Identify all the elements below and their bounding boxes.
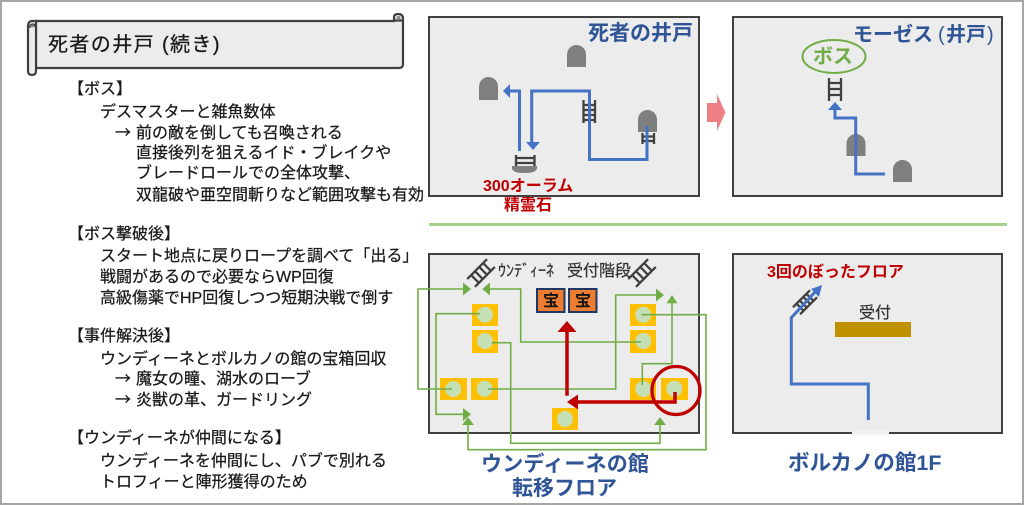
entrance gap xyxy=(852,431,889,435)
highlight circle and red route xyxy=(558,321,700,414)
panel: undine mansion xyxy=(418,254,706,450)
text block: after incident: 【事件解決後】 xyxy=(68,327,180,345)
title scroll banner: 死者の井戸 (続き) xyxy=(48,33,221,56)
icon: ladders xyxy=(467,259,656,287)
treasure chests: 宝 xyxy=(575,292,591,310)
divider xyxy=(429,223,1007,226)
arrow: route xyxy=(791,285,868,420)
text block: boss: ブレードロールでの全体攻撃、 xyxy=(136,163,360,182)
icon: well with ladder xyxy=(512,155,537,173)
text block: after incident: 魔女の瞳、湖水のローブ xyxy=(136,369,311,388)
label: reception: 受付 xyxy=(859,304,891,322)
panel: moses well xyxy=(733,17,1002,196)
heading: moses well: モーゼス xyxy=(853,22,933,46)
arrow: pink xyxy=(707,94,726,131)
text block: boss xyxy=(68,80,424,204)
text block: after incident: → xyxy=(115,365,131,389)
warp arrows xyxy=(418,282,706,450)
icon: tombstones xyxy=(846,134,912,182)
text block: undine joins xyxy=(68,428,387,491)
text block: after boss: スタート地点に戻りロープを調べて「出る」 xyxy=(100,247,418,265)
heading: well of the dead: 死者の井戸 xyxy=(588,22,693,45)
warp tiles xyxy=(440,304,688,430)
callout: boss: ボス xyxy=(813,45,853,68)
label: third floor: 3回のぼったフロア xyxy=(767,263,904,281)
text block: boss: 双龍破や亜空間斬りなど範囲攻撃も有効 xyxy=(136,186,424,204)
panel: well of the dead xyxy=(429,17,699,214)
heading: moses well: ) xyxy=(987,24,994,46)
text block: boss: → xyxy=(115,119,131,143)
arrow: route to well xyxy=(526,91,647,160)
text block: boss: 直接後列を狙えるイド・ブレイクや xyxy=(136,143,391,162)
treasure chests xyxy=(537,289,596,312)
heading: volcano mansion: ボルカノの館1F xyxy=(788,451,941,475)
icon: ladders xyxy=(584,100,654,144)
text block: after boss: 【ボス撃破後】 xyxy=(68,225,180,243)
text block: after boss: 高級傷薬でHP回復しつつ短期決戦で倒す xyxy=(100,289,393,307)
label: spirit stone: 精霊石 xyxy=(504,195,552,214)
text block: after incident xyxy=(68,327,386,410)
label: reception stairs: 受付階段 xyxy=(567,262,631,280)
text block: undine joins: 【ウンディーネが仲間になる】 xyxy=(68,428,291,447)
arrow: route from well xyxy=(503,84,520,151)
text block: boss: 前の敵を倒しても召喚される xyxy=(136,124,343,142)
label: 300 aurum: 300オーラム xyxy=(483,177,573,195)
text block: undine joins: ウンディーネを仲間にし、パブで別れる xyxy=(100,451,387,470)
text block: undine joins: トロフィーと陣形獲得のため xyxy=(100,473,308,491)
heading: moses well: 井戸 xyxy=(946,23,986,46)
arrow: route to boss xyxy=(828,102,885,174)
text block: boss: 【ボス】 xyxy=(68,80,132,98)
label: undine: ｳﾝﾃﾞｨｰﾈ xyxy=(498,262,554,280)
icon: ladder xyxy=(793,290,817,314)
heading: undine mansion: 転移フロア xyxy=(512,477,617,500)
heading: undine mansion: ウンディーネの館 xyxy=(481,452,649,476)
reception counter xyxy=(835,322,911,337)
icon: tombstones xyxy=(479,45,657,132)
treasure chests: 宝 xyxy=(543,292,559,310)
icon: ladder xyxy=(829,78,841,101)
heading: undine mansion xyxy=(481,452,649,500)
text block: after incident: 炎獣の革、ガードリング xyxy=(136,391,312,409)
heading: moses well: ( xyxy=(938,24,945,46)
text block: boss: デスマスターと雑魚数体 xyxy=(100,102,276,121)
callout: boss xyxy=(802,40,866,73)
text block: after boss xyxy=(68,225,418,307)
text block: after incident: ウンディーネとボルカノの館の宝箱回収 xyxy=(100,349,386,368)
panel: volcano mansion 1F xyxy=(733,254,1002,435)
text block: after incident: → xyxy=(115,386,131,410)
title scroll banner xyxy=(28,14,403,75)
text block: after boss: 戦闘があるので必要ならWP回復 xyxy=(100,268,334,286)
